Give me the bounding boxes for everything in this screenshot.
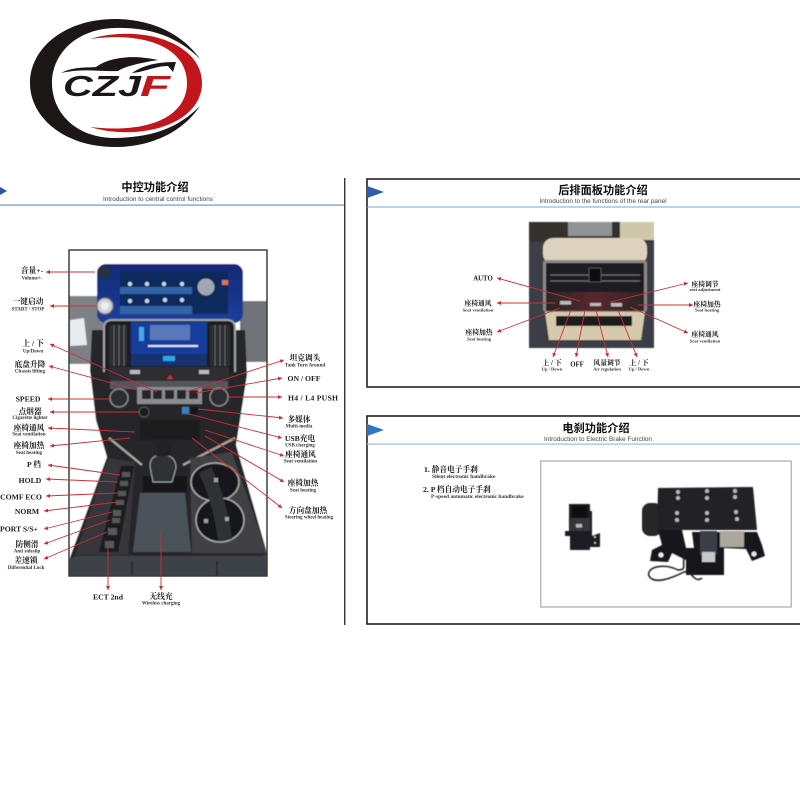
callout: norm: NORM [15, 507, 40, 516]
logo: black crescent [30, 19, 200, 147]
cup holders [191, 463, 244, 542]
callout: chassis lifting: Chassis lifting [15, 370, 46, 375]
callout: seat heating right [638, 300, 722, 312]
callout: seat heating right: 座椅加热 [288, 478, 320, 488]
callout: seat heating right [205, 436, 320, 494]
logo: F letter: F [140, 71, 172, 103]
callout: seat ventilation right [630, 307, 721, 344]
callout: steering wheel heating: Steering wheel heating [285, 516, 334, 521]
panel border [367, 416, 800, 624]
callout: seat ventilation right: Seat ventilation [284, 460, 317, 465]
callout: up down left [542, 310, 571, 372]
logo: red crescent [90, 34, 202, 132]
header: central control [0, 180, 344, 206]
callout: usb charging: USB充电 [285, 433, 315, 443]
callout: seat ventilation left: 座椅通风 [14, 422, 45, 432]
callout: differential lock: 差速锁 [14, 555, 39, 565]
callout: multi-media: 多媒体 [287, 414, 311, 424]
logo: CZJF oval emblem [30, 19, 202, 147]
callout: wireless charging: 无线充 [149, 591, 173, 601]
armrest band [69, 553, 267, 576]
callout: seat ventilation left: Seat ventilation [12, 432, 46, 438]
callout: up down: 上 / 下 [22, 338, 44, 348]
panel right border [344, 178, 345, 625]
callout: up down: Up/Down [23, 350, 43, 355]
callout: speed: SPEED [16, 394, 41, 404]
callout: air regulation: Air regulation [593, 366, 621, 372]
callout: seat ventilation left [463, 298, 555, 312]
logo: car silhouette [61, 57, 176, 73]
callout: tank turn: 坦克调头 [290, 352, 322, 362]
callout: multi-media [198, 409, 313, 430]
callout: up down [22, 338, 157, 392]
callout: P gear [27, 459, 120, 475]
callout: seat ventilation right: 座椅通风 [285, 449, 316, 459]
callout: up down left: 上 / 下 [543, 358, 562, 367]
callout: h4 l4 push: H4 / L4 PUSH [288, 394, 338, 402]
overlay: COMF text: COMF [130, 434, 153, 443]
callout: seat heating right: Seat heating [695, 308, 720, 312]
text block: brake features [423, 464, 524, 500]
callout: seat adjustment: seat adjustment [689, 287, 721, 292]
callout: seat heating left: 座椅加热 [14, 440, 46, 450]
callout: seat ventilation right [205, 430, 317, 465]
callout: auto [473, 276, 580, 301]
climate panel [109, 367, 229, 440]
callout: ect 2nd [93, 548, 124, 602]
callout: usb charging: USB charging [285, 443, 315, 448]
callout: ect 2nd: ECT 2nd [93, 592, 124, 602]
callout: P gear: P 档 [27, 459, 41, 469]
image frame [541, 461, 791, 607]
icon: brake actuator [642, 487, 765, 580]
callout: seat heating left [14, 438, 130, 456]
callout: cigarette lighter: 点烟器 [18, 406, 42, 416]
callout: comf eco [0, 492, 118, 502]
callout: port s/s+: PORT S/S+ [0, 524, 38, 534]
header: electric brake [367, 421, 800, 445]
panel: rear panel functions [367, 179, 800, 387]
header: electric brake: Introduction to Electric Brake Function [544, 436, 653, 443]
callout: chassis lifting: 底盘升降 [15, 359, 46, 369]
panel: electric brake function [367, 416, 800, 624]
callout: up down right [618, 310, 650, 372]
callout: volume [21, 265, 95, 282]
callout: steering wheel heating: 方向盘加热 [289, 505, 329, 515]
callout: seat heating left: 座椅加热 [465, 328, 494, 336]
callout: seat heating right: Seat heating [290, 489, 317, 494]
callout: chassis lifting [15, 359, 137, 390]
callout: seat adjustment [610, 280, 721, 302]
callout: multi-media: Multi-media [286, 425, 313, 430]
callout: seat ventilation right: 座椅通风 [691, 330, 719, 338]
callout: speed [16, 394, 110, 404]
text block: brake features: 2. P 档自动电子手刹 [423, 484, 491, 494]
callout: hold [19, 476, 118, 485]
photo: center console [69, 250, 267, 576]
text block: brake features: Silent electronic handbrake [432, 474, 496, 480]
callout: air regulation: 风量调节 [593, 358, 621, 367]
callout: wireless charging [142, 532, 181, 607]
panel border [367, 179, 800, 387]
callout: anti sideslip: Anti sideslip [14, 549, 40, 554]
header: electric brake: 电刹功能介绍 [562, 421, 630, 435]
callout: on off: ON / OFF [288, 374, 321, 383]
callout: seat heating right: 座椅加热 [693, 300, 722, 308]
callout: anti sideslip: 防侧滑 [15, 539, 39, 549]
callout: tank turn: Tank Turn Around [285, 364, 325, 369]
chrome frame and center display [104, 320, 235, 372]
callout: up down right: Up / Down [629, 366, 650, 372]
callout: tank turn [186, 352, 325, 392]
callout: seat heating left [465, 308, 560, 342]
photo frame [69, 250, 267, 576]
photo: rear control panel [529, 222, 654, 348]
callout: steering wheel heating [192, 438, 334, 521]
icon: handbrake switch [565, 504, 600, 550]
callout: seat adjustment: 座椅调节 [691, 280, 719, 288]
callout: wireless charging: Wireless charging [142, 602, 181, 607]
callout: cigarette lighter: Cigarette lighter [12, 416, 48, 421]
header: rear panel [367, 183, 800, 208]
header: central control: 中控功能介绍 [121, 180, 189, 194]
header: rear panel: Introduction to the functions of the rear panel [540, 198, 666, 205]
text block: brake features: 1. 静音电子手刹 [424, 464, 478, 474]
callout: anti sideslip [14, 520, 110, 554]
callout: seat heating left: Seat heating [16, 451, 43, 456]
callout: start stop: START / STOP [12, 307, 44, 312]
wireless charging pad [133, 493, 191, 552]
wood panels [190, 452, 267, 553]
callout: usb charging [185, 413, 315, 448]
callout: seat ventilation left: Seat ventilation [463, 308, 494, 312]
callout: comf eco: COMF ECO [0, 492, 42, 502]
callout: up down left: Up / Down [542, 366, 563, 372]
callout: cigarette lighter [12, 406, 140, 421]
callout: hold: HOLD [19, 476, 42, 485]
panel: central control functions [0, 178, 345, 625]
shifter [143, 442, 187, 492]
callout: volume: Volume+- [22, 277, 43, 282]
callout: differential lock [8, 532, 107, 571]
callout: h4 l4 push [228, 394, 338, 402]
text block: brake features: P-speed automatic electronic handbrake [431, 494, 524, 500]
callout: auto: AUTO [473, 276, 493, 282]
callout: differential lock: Differential Lock [8, 566, 45, 571]
chrome trims [109, 438, 235, 465]
callout: start stop [12, 296, 97, 312]
logo: CZJ letters: CZJ [63, 71, 142, 103]
callout: off [570, 310, 585, 368]
header: rear panel: 后排面板功能介绍 [558, 183, 648, 197]
callout: volume: 音量+- [21, 265, 44, 275]
callout: start stop: 一键启动 [13, 296, 44, 306]
callout: port s/s+ [0, 512, 112, 534]
callout: on off [196, 374, 321, 393]
callout: seat ventilation right: Seat ventilation [690, 338, 721, 344]
callout: off: OFF [570, 362, 584, 368]
callout: seat ventilation left: 座椅通风 [464, 298, 492, 308]
callout: norm [15, 502, 118, 516]
switch strip [99, 466, 134, 552]
callout: seat heating left: Seat heating [467, 336, 492, 342]
header: central control: Introduction to central control functions [103, 196, 213, 203]
callout: up down right: 上 / 下 [630, 358, 649, 367]
callout: air regulation [593, 310, 621, 372]
callout: seat ventilation left [12, 422, 135, 438]
blue top screen [97, 264, 243, 323]
